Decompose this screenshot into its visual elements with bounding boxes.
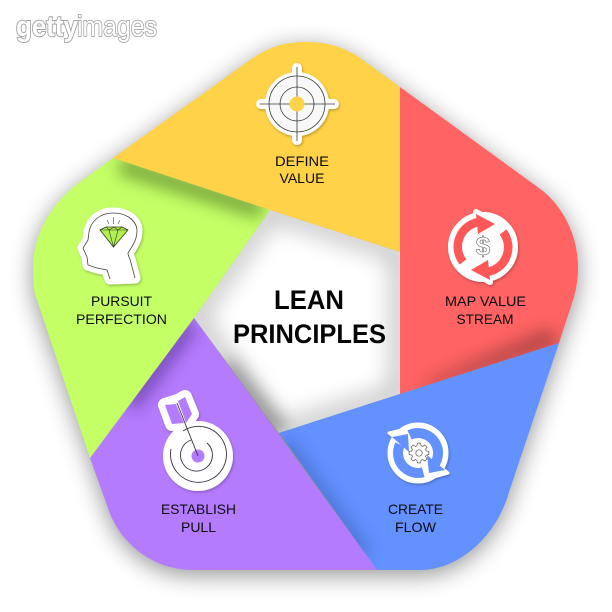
title: LEAN <box>274 285 344 315</box>
icon: head with diamond <box>83 213 137 279</box>
getty watermark <box>16 11 157 43</box>
label: map value stream: MAP VALUE <box>445 293 526 309</box>
label: pursuit perfection <box>76 293 167 327</box>
panel: create flow <box>279 343 559 570</box>
icon: dollar cycle <box>451 212 515 282</box>
label: pursuit perfection: PERFECTION <box>76 311 167 327</box>
icon: target <box>256 63 339 145</box>
title: PRINCIPLES <box>233 319 386 349</box>
label: establish pull: ESTABLISH <box>161 501 236 517</box>
label: establish pull <box>161 501 236 535</box>
getty watermark: getty <box>16 11 78 43</box>
icon: gear cycle <box>389 424 448 482</box>
icon: dollar cycle: $ <box>476 231 491 261</box>
panel: establish pull <box>85 310 385 575</box>
title <box>233 285 386 349</box>
getty watermark: images <box>77 11 157 43</box>
label: create flow: FLOW <box>395 519 437 535</box>
panel: pursuit perfection <box>28 150 278 465</box>
label: map value stream: STREAM <box>456 311 514 327</box>
label: define value: DEFINE <box>275 153 329 169</box>
label: pursuit perfection: PURSUIT <box>91 293 152 309</box>
label: establish pull: PULL <box>181 519 216 535</box>
label: create flow: CREATE <box>388 501 443 517</box>
panel: centre <box>194 210 400 433</box>
label: map value stream <box>445 293 526 327</box>
label: create flow <box>388 501 443 535</box>
panel: map value stream <box>400 87 578 394</box>
label: define value: VALUE <box>280 170 324 186</box>
panel: define value <box>113 42 400 252</box>
icon: dart target <box>163 397 233 491</box>
label: define value <box>275 153 329 186</box>
outer shadow <box>33 47 578 575</box>
